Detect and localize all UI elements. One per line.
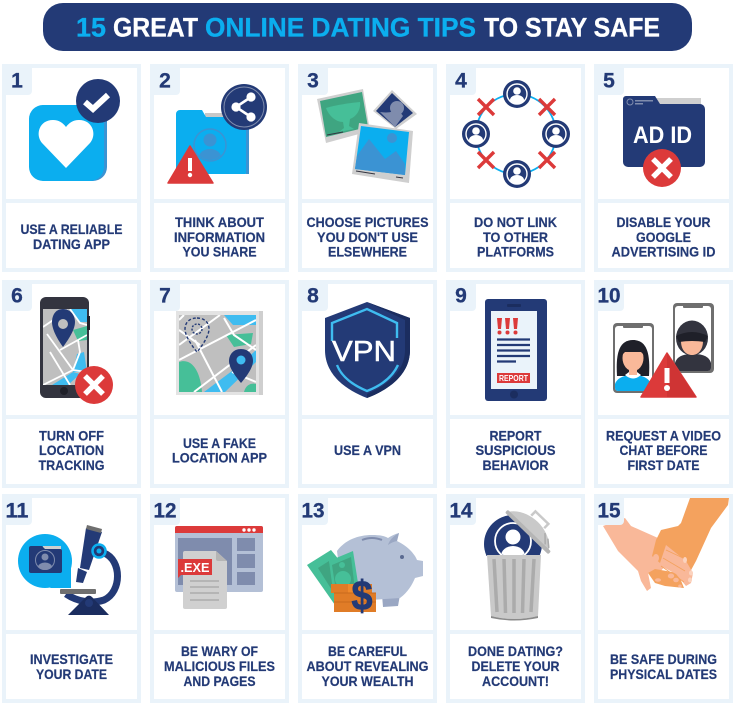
number 15: 15 (598, 500, 621, 522)
panel: tip 12 (150, 494, 289, 703)
caption 7: USE A FAKE (183, 436, 256, 451)
caption 5: ADVERTISING ID (612, 244, 716, 260)
caption 2 (174, 215, 265, 260)
caption 6: LOCATION (39, 443, 104, 458)
number 6: 6 (11, 284, 23, 308)
icon: piggy bank with money: $ (352, 572, 372, 619)
number 2: 2 (159, 70, 171, 92)
panel: tip 2 (150, 64, 289, 272)
caption 9: BEHAVIOR (482, 458, 549, 473)
caption 9: SUSPICIOUS (476, 443, 556, 458)
caption 7: LOCATION APP (172, 450, 267, 466)
caption 4: TO OTHER (483, 230, 548, 245)
number 4: 4 (455, 70, 467, 92)
icon: ad id folder (623, 96, 705, 187)
caption 1: USE A RELIABLE (20, 222, 122, 237)
panel: tip 8 (298, 280, 437, 488)
caption 13: YOUR WEALTH (322, 674, 414, 689)
panel: tip 3 (298, 64, 437, 272)
caption 12: AND PAGES (184, 674, 256, 689)
caption 2: YOU SHARE (182, 244, 256, 260)
caption 10: FIRST DATE (628, 458, 700, 473)
caption 3: CHOOSE PICTURES (306, 215, 428, 230)
title banner: TO STAY SAFE (484, 12, 660, 42)
icon: heart app with check (29, 79, 120, 181)
number 12: 12 (154, 500, 176, 522)
number 11: 11 (6, 500, 29, 522)
number 7: 7 (159, 284, 171, 308)
icon: microscope over profile (18, 525, 118, 615)
caption 15 (610, 652, 717, 682)
caption 5: GOOGLE (636, 230, 691, 245)
caption 2: THINK ABOUT (175, 215, 265, 230)
number 1: 1 (11, 70, 23, 92)
icon: fake location map (176, 311, 263, 395)
caption 13: BE CAREFUL (328, 644, 407, 659)
panel: tip 11 (2, 494, 141, 703)
caption 7 (172, 436, 267, 466)
caption 12: MALICIOUS FILES (164, 659, 275, 674)
caption 14: ACCOUNT! (482, 674, 549, 689)
panel: tip 10 (594, 280, 733, 488)
icon: vpn shield: VPN (332, 336, 396, 368)
icon: report on phone: REPORT (499, 374, 528, 383)
icon: holding hands (603, 498, 729, 591)
caption 5 (612, 215, 716, 260)
caption 6: TURN OFF (39, 428, 104, 444)
caption 9: REPORT (490, 428, 542, 444)
caption 6: TRACKING (38, 458, 104, 473)
icon: ad id folder: AD ID (633, 122, 692, 149)
number 5: 5 (603, 70, 615, 92)
caption 3: YOU DON'T USE (317, 230, 418, 245)
caption 6 (38, 428, 104, 473)
caption 10 (606, 428, 721, 473)
panel: tip 5 (594, 64, 733, 272)
caption 10: CHAT BEFORE (620, 443, 708, 458)
caption 15: PHYSICAL DATES (610, 667, 717, 682)
icon: vpn shield (325, 302, 410, 398)
number 13: 13 (302, 500, 324, 522)
number 14: 14 (450, 500, 473, 522)
icon: folder with share and warning (168, 84, 267, 183)
number 9: 9 (455, 284, 467, 308)
icon: malicious exe file (175, 526, 263, 609)
caption 4 (474, 215, 557, 260)
icon: phone location off (40, 297, 113, 404)
caption 8: USE A VPN (334, 443, 401, 458)
caption 12: BE WARY OF (181, 644, 258, 659)
caption 15: BE SAFE DURING (610, 652, 717, 667)
caption 1 (20, 222, 122, 252)
icon: photographs (317, 89, 417, 183)
icon: unlinked profiles (462, 80, 570, 188)
caption 9 (476, 428, 556, 473)
caption 5: DISABLE YOUR (616, 215, 711, 230)
caption 14 (468, 644, 563, 689)
caption 13: ABOUT REVEALING (306, 659, 428, 674)
number 8: 8 (307, 284, 319, 308)
caption 1: DATING APP (33, 237, 110, 252)
caption 13 (306, 644, 428, 689)
panel: tip 7 (150, 280, 289, 488)
title banner: ONLINE DATING TIPS (205, 12, 476, 42)
icon: malicious exe file: .EXE (180, 560, 210, 575)
caption 4: DO NOT LINK (474, 215, 557, 230)
caption 12 (164, 644, 275, 689)
caption 14: DONE DATING? (468, 644, 563, 659)
panel: tip 14 (446, 494, 585, 703)
title banner: 15 (76, 12, 106, 42)
panel: tip 4 (446, 64, 585, 272)
panel: tip 6 (2, 280, 141, 488)
panel: tip 13 (298, 494, 437, 703)
number 3: 3 (307, 70, 319, 92)
icon: trash can with profile (484, 510, 550, 620)
caption 14: DELETE YOUR (472, 659, 560, 674)
caption 4: PLATFORMS (477, 244, 554, 260)
caption 3: ELSEWHERE (328, 244, 407, 260)
icon: report on phone (485, 299, 547, 401)
icon: video chat warning (613, 303, 714, 397)
caption 2: INFORMATION (174, 230, 265, 245)
icon: piggy bank with money (307, 533, 423, 619)
caption 3 (306, 215, 428, 260)
panel: tip 9 (446, 280, 585, 488)
caption 11: YOUR DATE (36, 667, 107, 682)
panel: tip 1 (2, 64, 141, 272)
title banner (43, 3, 692, 51)
number 10: 10 (598, 284, 620, 308)
caption 11 (30, 652, 113, 682)
caption 10: REQUEST A VIDEO (606, 428, 721, 444)
caption 11: INVESTIGATE (30, 652, 113, 667)
panel: tip 15 (594, 494, 733, 703)
title banner: GREAT (113, 12, 198, 42)
